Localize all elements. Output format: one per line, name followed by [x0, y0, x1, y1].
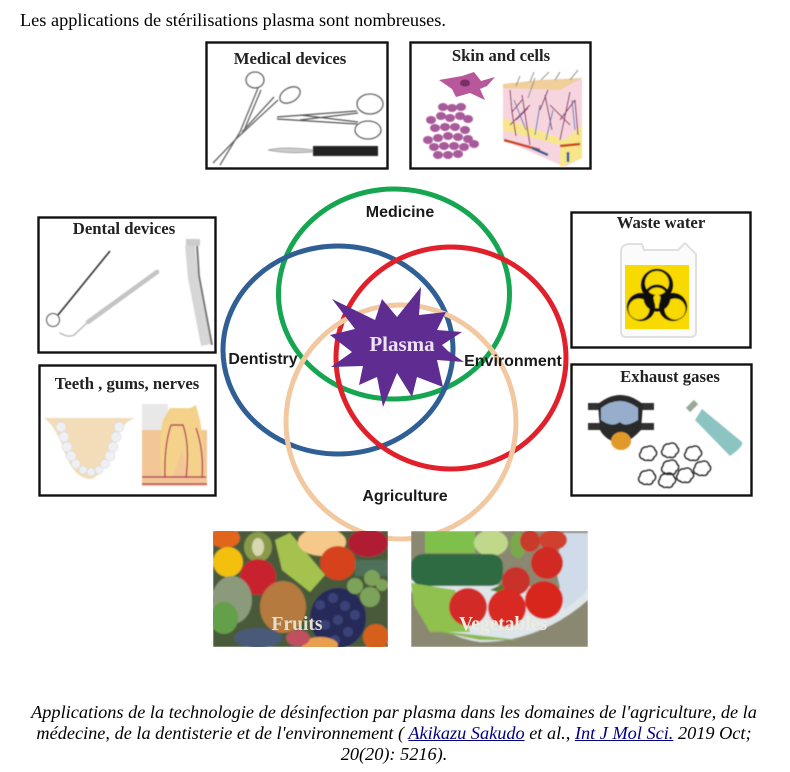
- panel: dental devices: [38, 218, 216, 352]
- circle: dentistry: [223, 246, 453, 454]
- main diagram: [37, 41, 753, 647]
- circle: agriculture: [286, 305, 516, 539]
- panel: waste water: [572, 212, 750, 348]
- icon: dental mirror: [46, 251, 110, 326]
- label: environment: Environment: [464, 353, 563, 370]
- circle: medicine: [278, 189, 510, 399]
- heading: exhaust gases: Exhaust gases: [620, 367, 720, 386]
- panel: exhaust gases: [572, 364, 752, 496]
- icon: skin cross-section: [503, 70, 582, 167]
- icon: gas mask: [588, 395, 654, 450]
- icon: dental probe: [60, 272, 157, 336]
- label: dentistry: Dentistry: [228, 351, 298, 368]
- caption: [30, 702, 757, 764]
- intro sentence: Les applications de stérilisations plasma sont nombreuses.: [20, 10, 446, 30]
- heading: skin and cells: Skin and cells: [452, 46, 551, 65]
- label: vegetables: Vegetables: [459, 614, 547, 635]
- photo: fruits: [210, 528, 389, 653]
- circle: environment: [336, 247, 566, 469]
- panel: teeth gums nerves: [40, 366, 216, 496]
- icon: surgical tools: [213, 72, 383, 165]
- label: agriculture: Agriculture: [362, 488, 448, 505]
- icon: gas cylinder: [688, 402, 742, 456]
- icon: smoke clouds: [639, 443, 711, 488]
- icon: cell cluster: [423, 103, 479, 159]
- icon: biohazard canister: [621, 243, 696, 337]
- label: fruits: Fruits: [272, 614, 323, 635]
- caption: médecine, de la dentisterie et de l'environnement ( Akikazu Sakudo et al., Int J Mol Sci. 2019 Oct;: [36, 723, 752, 743]
- icon: plasma star: [330, 287, 464, 407]
- panel: medical devices: [206, 42, 388, 168]
- caption: Applications de la technologie de désinfection par plasma dans les domaines de l'agriculture, de la: [31, 702, 757, 722]
- icon: dental handpiece: [186, 239, 212, 345]
- heading: waste water: Waste water: [617, 213, 706, 232]
- icon: tooth cross-section: [142, 404, 207, 487]
- heading: medical devices: Medical devices: [234, 49, 347, 68]
- icon: dental arch: [44, 418, 135, 479]
- photo: vegetables: [411, 530, 588, 647]
- label: plasma: Plasma: [369, 332, 435, 356]
- heading: dental devices: Dental devices: [73, 219, 176, 238]
- panel: skin and cells: [410, 42, 590, 168]
- chart: venn circles: [223, 189, 566, 539]
- icon: star-shaped cell: [439, 72, 495, 100]
- heading: teeth gums nerves: Teeth , gums, nerves: [55, 374, 200, 393]
- caption: 20(20): 5216).: [341, 744, 447, 764]
- label: medicine: Medicine: [366, 204, 434, 221]
